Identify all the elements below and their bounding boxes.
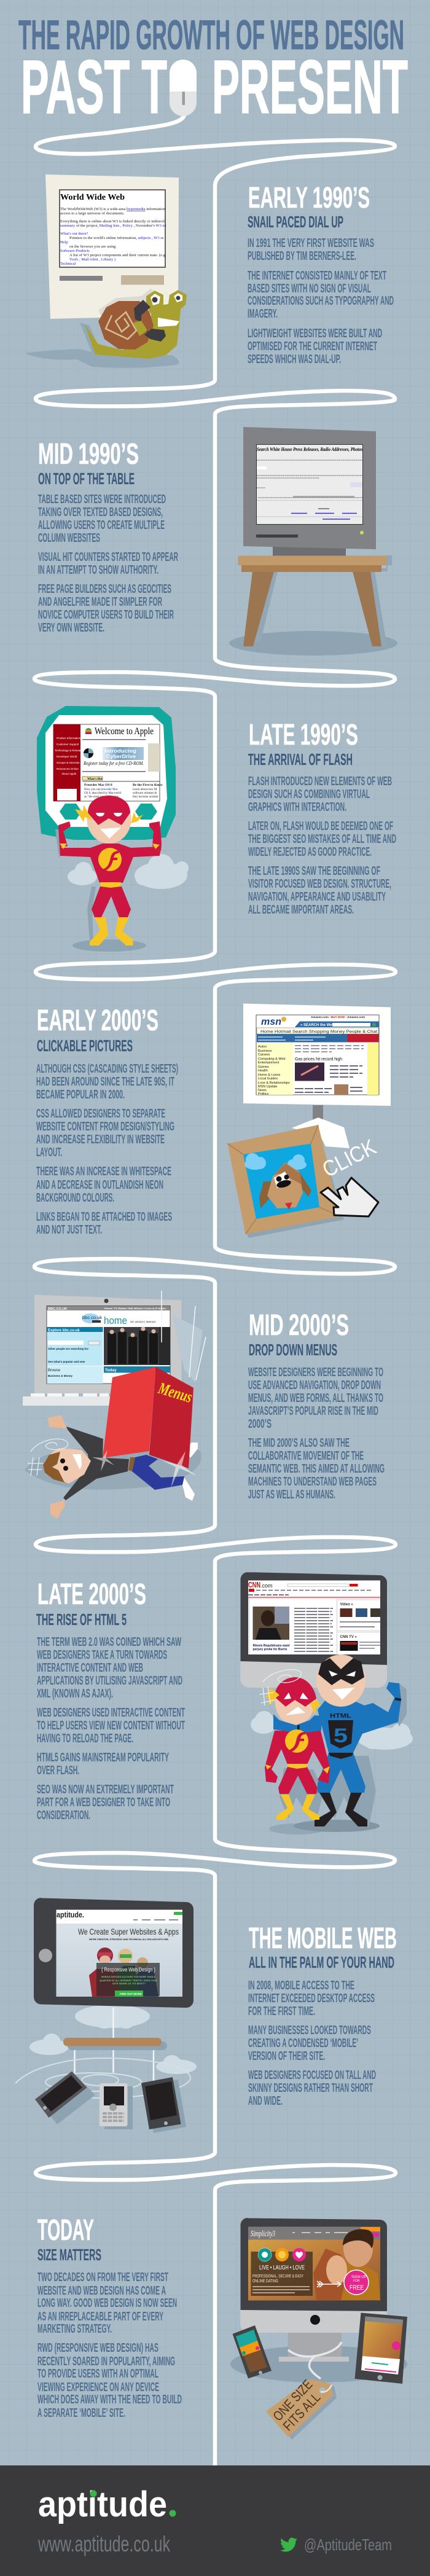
first website screenshot: Everything there is online about W3 is linked directly or indirectl [60,219,165,224]
kids [89,1948,158,1997]
laptop lid [34,1295,182,1393]
paper sign [45,174,179,319]
panel: early 1990s text [248,182,394,366]
panel: today text [37,2214,182,2420]
subheading: CLICKABLE PICTURES [37,1036,133,1055]
dizzy hash [259,1686,275,1705]
imac stand [288,2328,342,2357]
subheading: DROP DOWN MENUS [249,1341,337,1359]
keyboard keys [31,1393,109,1396]
msn website screenshot: msn [261,1017,281,1027]
subheading: ON TOP OF THE TABLE [38,469,135,488]
orbit rings [15,2058,190,2098]
first website screenshot: on the browser you are using [69,245,116,249]
panel: today illustration [230,2218,407,2440]
footer [0,2465,430,2576]
paragraphs: RWD (RESPONSIVE WEB DESIGN) HAS [37,2341,158,2355]
msn website screenshot: Amazon.com - BUY NOW - Amazon.com [311,1016,365,1019]
white billboard [243,1004,391,1106]
paragraphs: AS AN IRREPLACEABLE PART OF EVERY [37,2310,163,2323]
paragraphs: VERSION OF THEIR SITE. [248,2049,325,2063]
bbc website screenshot: Home TV Radio Talk Where I Live A-Z Index [104,1307,166,1310]
bbc website screenshot: home [104,1315,127,1326]
paragraphs: RECENTLY SOARED IN POPULARITY, AIMING [37,2355,175,2368]
paragraphs: 2000’S [248,1417,272,1431]
head [275,1677,315,1725]
responsive dating website screenshot: SIGN UP [351,2276,367,2279]
paragraphs: FOR THE FIRST TIME. [248,2005,315,2018]
responsive dating website screenshot: Simplicity3 [251,2230,275,2239]
msn website screenshot [256,1015,379,1096]
paragraphs: WEB DESIGNERS TAKE A TURN TOWARDS [37,1648,167,1662]
html5 superhero: 5 [334,1725,348,1747]
msn website screenshot: Home & Loans [258,1073,281,1077]
bbc website screenshot: Today [105,1368,117,1372]
imac bezel [241,2218,387,2311]
boots [276,1795,294,1820]
picture frame with dog [227,1125,340,1234]
paragraphs: LAYOUT. [36,1146,62,1159]
tag text line 2: FITS ALL [280,2389,323,2433]
msn website screenshot: Love & Relationships [258,1081,290,1085]
imac logo dot [310,2315,320,2325]
panel: late 1990s text [248,719,396,917]
msn website screenshot: Computing & Web [258,1057,286,1061]
paragraphs: IMAGERY. [248,307,278,321]
apple website screenshot: Register today for a free CD-ROM. [83,761,144,766]
shell shadow on paper [98,289,161,323]
first website screenshot: Pointers to the world's online information, subjects , W3 se [69,236,164,240]
twitter handle: @AptitudeTeam [304,2535,392,2554]
msn website screenshot: Local Guides [258,1077,278,1081]
trousers [132,1455,184,1490]
panel: late 1990s illustration [37,706,189,952]
era heading: LATE 1990’S [249,719,358,751]
first website screenshot: Tools , Mail robot , Library ) [69,257,115,262]
paragraphs: TO HELP USERS VIEW NEW CONTENT WITHOUT [37,1719,185,1732]
paragraphs: OVER FLASH. [37,1764,79,1777]
first website screenshot [60,190,166,267]
mouse cable [34,115,396,2465]
first website screenshot: access to a large universe of documents. [60,211,125,216]
bbc website screenshot: See what's popular and new [48,1360,85,1363]
motion lines [162,1291,206,1382]
paragraphs [36,1062,178,1237]
paragraphs [248,775,396,917]
rainbow apple [85,728,92,734]
website url: www.aptitude.co.uk [37,2531,171,2556]
paragraphs: WEBSITE AND WEB DESIGN HAS COME A [37,2284,166,2298]
responsive dating website screenshot: PROFESSIONAL, SECURE & EASY [252,2274,303,2279]
paragraphs: SPEEDS WHICH WAS DIAL-UP. [248,353,341,366]
apple website screenshot: OS 8, described by Macworld [84,792,121,795]
paragraphs: JUST AS WELL AS HUMANS. [248,1488,335,1501]
panel: early 2000s text [36,1004,178,1237]
monitor screen [257,445,363,525]
era heading: MID 2000’S [249,1309,349,1342]
floor shadow [229,631,397,656]
belt [287,1764,308,1769]
paragraphs: CONSIDERATION. [37,1809,90,1822]
icon: twitter bird [280,2538,297,2551]
paragraphs: VISUAL HIT COUNTERS STARTED TO APPEAR [38,550,178,564]
body and arms [265,1731,330,1783]
imac chin [240,2304,387,2333]
paragraphs: ALTHOUGH CSS (CASCADING STYLE SHEETS) [36,1062,178,1076]
post [313,1105,323,1124]
cnn website screenshot: .com [260,1583,273,1589]
head [43,1448,91,1484]
wrist strap [395,1697,401,1701]
bbc website screenshot: bbc.co.uk [82,1315,102,1320]
laptop base [23,1396,112,1406]
clouds [68,854,189,889]
monitor [243,427,376,549]
icon: hand cursor [321,1178,378,1216]
paragraphs [248,237,394,366]
paragraphs: A SEPARATE ‘MOBILE’ SITE. [37,2406,125,2420]
era heading: MID 1990’S [38,438,139,471]
webcam [104,1299,108,1303]
hands [48,1415,67,1428]
first website screenshot: Software Products [60,249,90,253]
paragraphs: THERE WAS AN INCREASE IN WHITESPACE [36,1165,171,1178]
large tablet [34,1898,194,2008]
sign buttons [60,276,103,281]
snail [85,290,187,359]
paragraphs: ALLOWING USERS TO CREATE MULTIPLE [38,519,165,532]
paragraphs: IN AN ATTEMPT TO SHOW AUTHORITY. [38,563,158,577]
ground shadow [269,1823,326,1834]
apple website screenshot: as "the most comprehensive [84,796,119,799]
paragraphs: BECAME POPULAR IN 2000. [36,1088,125,1102]
hero shadow [55,829,96,940]
disk slot and power light [256,534,298,538]
first website screenshot: The WorldWideWeb (W3) is a wide-area hypermedia information [60,207,166,211]
frame shadow [246,1129,344,1238]
html label on chest: HTML [330,1713,351,1720]
imac chin [240,1659,387,1688]
paragraphs: AND A DECREASE IN OUTLANDISH NEON [36,1178,163,1192]
paragraphs: LONG WAY. GOOD WEB DESIGN IS NOW SEEN [37,2296,177,2310]
belt [128,1457,135,1471]
msn website screenshot: Business [258,1049,272,1053]
panel: mid 1990s text [38,438,178,635]
paragraphs: FREE PAGE BUILDERS SUCH AS GEOCITIES [38,582,171,596]
panel: late 2000s text [36,1578,185,1822]
apple website screenshot: Technology & Research [55,749,84,752]
dizzy hash [28,1457,43,1476]
apple website screenshot: CyberDrive [106,754,136,759]
bbc website screenshot: Browse [48,1369,61,1372]
ground shadow [72,939,146,952]
responsive dating website screenshot [248,2226,380,2300]
aptitude website screenshot: FIND OUT MORE [120,1992,142,1995]
responsive dating website screenshot: ONLINE DATING [252,2279,278,2284]
arm around neck [273,1714,322,1733]
paragraphs: AND ANGELFIRE MADE IT SIMPLER FOR [38,595,162,609]
cnn website screenshot: CNN [248,1580,260,1589]
shoes [184,1443,198,1458]
paragraphs: TWO DECADES ON FROM THE VERY FIRST [37,2271,168,2284]
responsive dating website screenshot: LIVE • LAUGH • LOVE [259,2265,305,2271]
flash logo [285,1729,308,1753]
title [18,12,408,130]
msn website screenshot: Gas prices hit record high [295,1057,342,1062]
apple website screenshot: About Apple [61,772,77,775]
couple [313,2229,380,2300]
paragraphs: AND WIDE. [248,2094,283,2108]
msn website screenshot: Health [258,1069,268,1073]
belt [329,1753,353,1759]
apple website screenshot: Be the First to Know [133,783,163,787]
msn website screenshot: Autos [258,1045,267,1049]
msn website screenshot: Careers [258,1053,270,1057]
menu book [103,1367,195,1468]
flash superhero [58,796,162,945]
phone: dark smartphone [141,2077,186,2133]
ear bolts [265,1688,280,1705]
apple website screenshot: Resources Online [57,767,79,770]
cnn website screenshot [248,1580,380,1654]
apple website screenshot: Product Information [57,737,81,740]
aptitude website screenshot: WE'RE CREATIVE, STRATEGIC AND TECHNICAL ALL ROLLED INTO ONE [89,1938,168,1941]
msn website screenshot: Home Hotmail Search Shopping Money People & Chat [260,1030,377,1034]
paragraphs: XML (KNOWN AS AJAX). [37,1687,113,1701]
panel: mid 2000s illustration [23,1291,206,1519]
phone: keypad handset [100,2083,133,2129]
bbc website screenshot: BBC.CO.UK [48,1307,67,1311]
paragraphs: COLUMN WEBSITES [38,531,100,545]
cables [288,2342,342,2379]
paragraphs: HAVING TO RELOAD THE PAGE. [37,1732,133,1745]
panel: mobile web illustration [15,1898,197,2133]
paragraphs: INTERACTIVE CONTENT AND WEB [37,1661,143,1675]
tag text line 1: ONE SIZE [270,2376,316,2424]
white arrow head behind frame [292,1118,350,1148]
monitor neck [273,546,346,556]
aptitude website screenshot: { Responsive Web Design } [101,1967,155,1973]
responsive dating website screenshot: FREE [350,2284,364,2292]
responsive dating website screenshot: FOR [353,2279,360,2283]
phone: tilted smartphone [35,2072,95,2124]
first website screenshot: summary of the project, Mailing lists , Policy , November's W3 ne [60,224,166,228]
paragraphs: NOVICE COMPUTER USERS TO BUILD THEIR [38,608,174,622]
bracelets [265,1764,272,1769]
floor shadow [230,2346,407,2382]
aptitude website screenshot [57,1909,182,1997]
panel: late 2000s illustration [240,1572,413,1834]
apple website screenshot: Customer Support [57,743,79,746]
paragraphs: HAD BEEN AROUND SINCE THE LATE 90S, IT [36,1075,174,1089]
msn website screenshot: Games [258,1065,269,1069]
html5 shield [328,1720,353,1748]
era heading: TODAY [37,2214,94,2247]
cnn website screenshot: perjury probe for Burris [253,1648,287,1651]
msn website screenshot: Entertainment [258,1061,280,1065]
clouds [29,2005,197,2074]
subheading: THE RISE OF HTML 5 [36,1610,127,1629]
tablet home button [39,1949,52,1962]
paragraphs: SEO WAS NOW AN EXTREMELY IMPORTANT [37,1783,174,1796]
icon: computer mouse as the letter O [170,60,197,116]
paragraphs [248,1366,385,1501]
bbc website screenshot: Business & Money [48,1374,73,1377]
title line 2 left: PAST T [21,45,167,130]
cnn website screenshot: Video » [340,1603,353,1607]
msn website screenshot: Politics [258,1092,269,1096]
table shadow [252,555,392,646]
paragraphs: WEBSITE CONTENT FROM DESIGN/STYLING [36,1120,174,1133]
paragraphs: HTML5 GAINS MAINSTREAM POPULARITY [37,1751,169,1764]
paragraphs [248,1979,376,2108]
hexagon details [60,804,82,820]
paragraphs: BACKGROUND COLOURS. [36,1191,114,1205]
aptitude website screenshot: We Create Super Websites & Apps [78,1927,179,1936]
panel: mid 2000s text [248,1309,385,1501]
paragraphs: TAKING OVER TEXTED BASED DESIGNS, [38,506,163,519]
apple website screenshot: Preorder Mac OS 8 [84,783,112,787]
monitor screen: Search White House Press Releases, Radio Addresses, Photos [257,446,363,452]
first website screenshot: Technical [60,262,76,266]
cnn website screenshot: Illinois Republicans want [253,1644,290,1648]
msn website screenshot: » SEARCH the Web [300,1024,335,1027]
table [238,555,387,646]
bbc website screenshot: UK version | Internat [130,1320,156,1323]
aptitude website screenshot: MOBILE DEVICES ACCOUNT FOR MORE THAN A [101,1975,155,1978]
apple website screenshot: software releases th [133,792,157,795]
paragraphs [38,493,178,635]
dizzy spiral [31,1439,68,1452]
apple website screenshot: Now you can preorder Mac [84,788,119,791]
apple website screenshot: they become availab [133,796,158,799]
paragraphs: THE TERM WEB 2.0 WAS COINED WHICH SAW [37,1635,181,1649]
mobile hanging rig [63,2008,167,2083]
paragraphs: WEB DESIGNERS USED INTERACTIVE CONTENT [37,1706,185,1720]
paragraphs: VIEWING EXPERIENCE ON ANY DEVICE [37,2381,159,2394]
falling man [28,1415,198,1519]
paragraphs [37,2271,182,2420]
apple website screenshot: Learn about new M [133,788,157,791]
paragraphs: APPLICATIONS BY UTILISING JAVASCRIPT AND [37,1674,182,1688]
cnn website screenshot: CNN TV » [340,1635,358,1639]
aptitude website screenshot: SITE WORK AT ITS BEST? [112,1982,146,1985]
msn website screenshot: News [258,1089,267,1092]
paragraphs: LINKS BEGAN TO BE ATTACHED TO IMAGES [36,1210,172,1224]
apple website screenshot: What's Hot [87,778,103,781]
apple website screenshot: Welcome to Apple [95,726,154,737]
aptitude website screenshot: QUARTER OF ALL INTERNET TRAFFIC, DOES YOUR [100,1979,157,1982]
era heading: LATE 2000’S [37,1578,146,1611]
panel: early 1990s illustration [25,174,187,368]
first website screenshot: Help [60,240,68,245]
left phone [232,2325,272,2379]
boots [315,1793,337,1826]
sparkles [92,1450,197,1488]
right tablet [355,2312,407,2384]
clouds [251,1711,413,1750]
first website screenshot: A list of W3 project components and their current state. (e.g [69,253,166,257]
apple website screenshot: Introducing [104,748,136,754]
price tag [266,2376,337,2440]
panel: mobile web text [248,1922,397,2108]
subheading: SIZE MATTERS [37,2245,101,2264]
dizzy spiral [263,1670,301,1683]
aptitude website screenshot: aptitude. [57,1910,84,1919]
paragraphs: AND INCREASE FLEXIBILITY IN WEBSITE [36,1133,165,1146]
paragraphs: CSS ALLOWED DESIGNERS TO SEPARATE [36,1107,165,1121]
paragraphs: VERY OWN WEBSITE. [38,621,104,635]
paragraphs [37,1635,185,1822]
floor shadow [25,1446,201,1490]
ground shadow [25,349,179,368]
paragraphs: MARKETING STRATEGY. [37,2322,112,2336]
bbc website screenshot: Other people are searching for: [48,1347,90,1350]
legs [278,1767,318,1794]
teal monitor [37,706,176,840]
flash superhero defeated [259,1670,330,1820]
subheading: SNAIL PACED DIAL UP [248,213,343,231]
era heading: EARLY 2000’S [37,1004,158,1037]
click label: CLICK [318,1134,380,1182]
paragraphs: AND NOT JUST TEXT. [36,1223,102,1237]
hero shadows [280,1683,407,1828]
paragraphs: TABLE BASED SITES WERE INTRODUCED [38,493,166,506]
paragraphs: WHICH DOES AWAY WITH THE NEED TO BUILD [37,2393,182,2406]
imac bezel [241,1572,387,1665]
first website screenshot: What's out there? [60,232,88,236]
jacket [63,1427,129,1500]
apple website screenshot: Developer World [57,755,77,758]
panel: mid 1990s monitor on table [229,427,397,656]
first website screenshot: World Wide Web [60,193,125,202]
paragraphs: PART FOR A WEB DESIGNER TO TAKE INTO [37,1796,170,1809]
menu book: Menus [156,1379,195,1406]
paragraphs: TO PROVIDE USERS WITH AN OPTIMAL [37,2367,158,2381]
html5 superhero [315,1654,401,1826]
panel: early 2000s illustration [227,1004,391,1238]
bbc website screenshot: Explore bbc.co.uk [48,1329,80,1333]
msn website screenshot: MSN Update [258,1085,278,1089]
aptitude logo: aptitude [38,2484,167,2524]
apple website screenshot: Groups & Interests [57,761,80,764]
bbc website screenshot [47,1306,170,1384]
apple website screenshot [53,724,163,801]
